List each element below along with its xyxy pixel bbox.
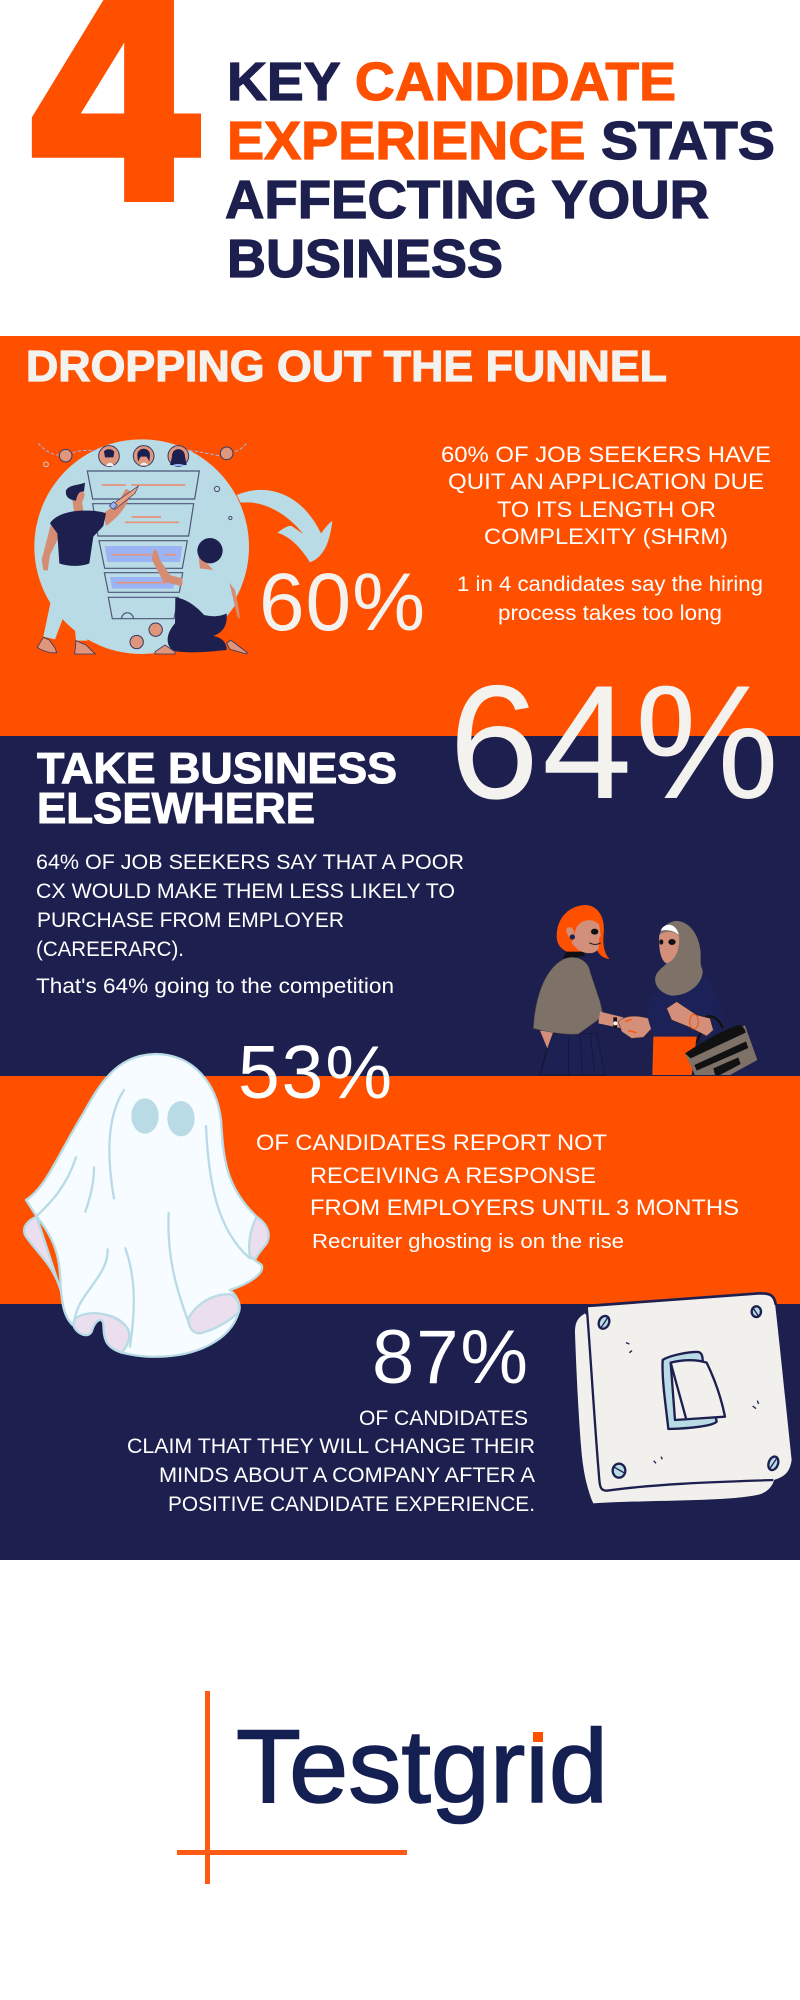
title: BUSINESS <box>227 229 503 289</box>
person 1 hair and face <box>557 905 609 959</box>
panel: dropping out the funnel <box>0 336 800 736</box>
text block: 64% description: (CAREERARC). <box>36 937 184 961</box>
panel: change minds <box>0 1304 800 1560</box>
text block: 53% description: RECEIVING A RESPONSE <box>310 1163 596 1188</box>
title: KEY CANDIDATE <box>227 52 676 112</box>
heading: take business elsewhere <box>37 744 397 833</box>
panel: recruiter ghosting <box>0 1076 800 1304</box>
title: EXPERIENCE STATS <box>227 111 775 171</box>
standing man <box>43 565 91 641</box>
heading: take business elsewhere: TAKE BUSINESS <box>37 744 397 793</box>
text block: 64% description: PURCHASE FROM EMPLOYER <box>37 908 344 932</box>
text block: 53% description: FROM EMPLOYERS UNTIL 3 MONTHS <box>310 1195 739 1220</box>
illustration: funnel with two people <box>34 439 332 654</box>
illustration: ghost <box>24 1054 269 1357</box>
text block: 60% description: TO ITS LENGTH OR <box>497 497 716 522</box>
heading: take business elsewhere: ELSEWHERE <box>37 784 315 833</box>
text block: 87% description: OF CANDIDATES <box>359 1407 528 1430</box>
panel: take business elsewhere <box>0 736 800 1076</box>
text block: 87% description: CLAIM THAT THEY WILL CHANGE THEIR <box>127 1435 535 1458</box>
funnel tiers <box>87 471 199 619</box>
text block: 64% description: CX WOULD MAKE THEM LESS LIKELY TO <box>36 879 455 903</box>
stat: 87%: 87% <box>372 1315 528 1400</box>
text block: 53% description: Recruiter ghosting is on the rise <box>312 1231 624 1253</box>
heading: dropping out the funnel: DROPPING OUT THE FUNNEL <box>26 342 667 391</box>
logo: Testgrid <box>177 1691 608 1884</box>
text block: 53% description <box>256 1130 739 1253</box>
text block: 64% description: 64% OF JOB SEEKERS SAY THAT A POOR <box>36 850 464 874</box>
text block: 60% description: 1 in 4 candidates say the hiring <box>457 573 763 596</box>
person 2 <box>648 977 724 1037</box>
illustration: handshake <box>533 905 757 1075</box>
title <box>225 52 775 289</box>
text block: 60% description <box>441 442 771 625</box>
logo: Testgrid: Testgrid <box>236 1709 608 1825</box>
text block: 87% description <box>127 1407 535 1516</box>
illustration: light switch <box>575 1293 792 1503</box>
text block: 53% description: OF CANDIDATES REPORT NOT <box>256 1130 607 1155</box>
text block: 60% description: QUIT AN APPLICATION DUE <box>448 469 764 494</box>
text block: 87% description: POSITIVE CANDIDATE EXPERIENCE. <box>168 1493 535 1516</box>
stat: 64%: 64% <box>449 652 779 833</box>
text block: 60% description: 60% OF JOB SEEKERS HAVE <box>441 442 771 467</box>
stat: 53%: 53% <box>238 1030 392 1114</box>
text block: 60% description: COMPLEXITY (SHRM) <box>484 524 728 549</box>
text block: 87% description: MINDS ABOUT A COMPANY AFTER A <box>159 1464 535 1487</box>
text block: 60% description: process takes too long <box>498 602 722 625</box>
text block: 64% description: That's 64% going to the competition <box>36 975 394 998</box>
stat: 60%: 60% <box>259 557 425 648</box>
text block: 64% description <box>36 850 464 998</box>
curved arrow <box>237 490 332 562</box>
title: AFFECTING YOUR <box>225 170 709 230</box>
kneeling person <box>152 550 183 587</box>
